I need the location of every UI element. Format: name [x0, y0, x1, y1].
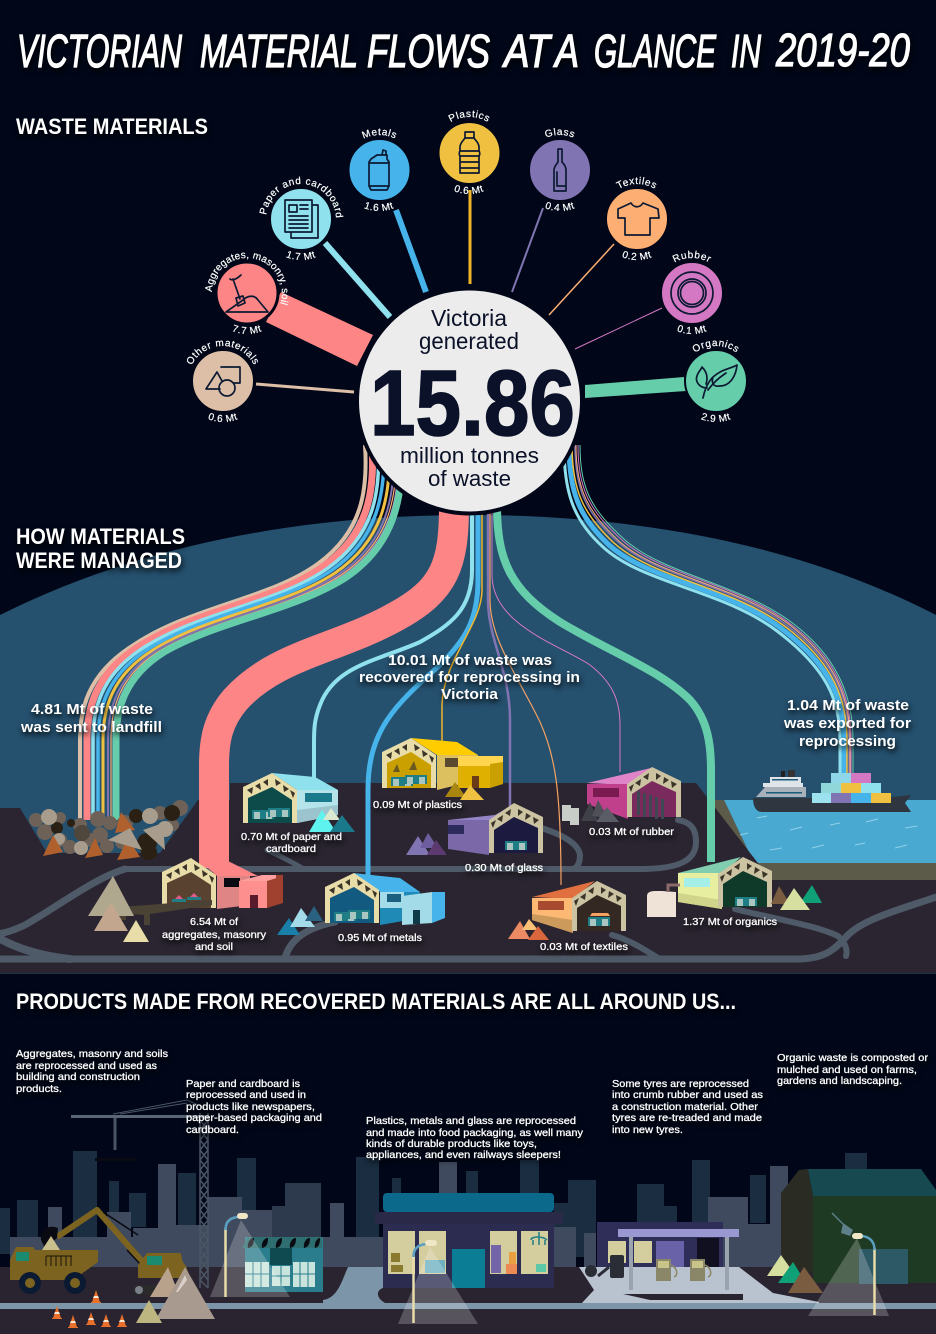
title: MATERIAL [200, 25, 358, 77]
material: rubber: Rubber [672, 250, 712, 262]
material: organics: Organics [692, 340, 738, 352]
material: metals [350, 128, 410, 212]
body text: aggregates [16, 1048, 168, 1095]
material: plastics: Plastics [448, 110, 490, 122]
crane [71, 1100, 208, 1288]
body text: plastics, metals and glass: appliances, and even railways sleepers! [366, 1149, 561, 1161]
body text: organics [777, 1052, 929, 1087]
title: VICTORIAN [17, 25, 183, 77]
material: glass [530, 128, 590, 212]
traffic cones [52, 1290, 127, 1328]
reprocessing tonnage labels: 6.54 Mt of [190, 916, 238, 928]
green barn [781, 1169, 936, 1284]
flow exported [564, 445, 853, 775]
organics piles [767, 1255, 823, 1293]
truck and excavator [10, 1210, 190, 1295]
flow label: exported: reprocessing [799, 734, 896, 750]
city skyline [0, 1151, 936, 1334]
material: textiles: Textiles [616, 176, 656, 188]
street lamp three [808, 1233, 889, 1316]
heading: waste materials: WASTE MATERIALS [16, 114, 208, 139]
building: rubber [562, 767, 681, 825]
reprocessing tonnage labels: 0.95 Mt of metals [338, 932, 422, 944]
central total circle: Victoria [431, 305, 507, 331]
material: other materials [186, 340, 258, 422]
material: rubber: 0.1 Mt [678, 325, 707, 334]
spokes from materials into the waste total [256, 190, 686, 398]
building: metals [277, 873, 445, 935]
central total circle: generated [419, 328, 519, 354]
material: aggregates, masonry, soil [205, 252, 288, 334]
material: rubber [662, 250, 722, 334]
title: GLANCE [594, 25, 717, 77]
body text: aggregates: products. [16, 1083, 62, 1095]
central total circle: 15.86 [370, 351, 575, 455]
body text: tyres: a construction material. Other [612, 1101, 759, 1113]
flow label: exported [783, 698, 911, 750]
material: metals: Metals [362, 128, 396, 138]
building: paper and cardboard [243, 773, 355, 832]
heading: how materials were managed [16, 524, 185, 573]
flow label: reprocessed in Victoria [359, 653, 580, 703]
reprocessing tonnage labels [162, 799, 777, 953]
material: glass: 0.4 Mt [546, 202, 575, 212]
title: IN [731, 25, 762, 77]
title: AT [502, 25, 552, 77]
material: plastics: 0.6 Mt [454, 185, 484, 194]
hemisphere backdrop [0, 515, 936, 880]
central total circle [357, 288, 582, 514]
title [17, 24, 910, 77]
body text: tyres: tyres are re-treaded and made [612, 1112, 762, 1124]
body text: tyres [612, 1078, 763, 1136]
body text: paper: cardboard. [186, 1124, 239, 1136]
material: aggregates, masonry, soil: 7.7 Mt [233, 324, 262, 334]
building: aggregates, masonry and soil [88, 858, 283, 942]
forecourts and road [0, 1267, 936, 1309]
heading: products: PRODUCTS MADE FROM RECOVERED MATERIALS ARE ALL AROUND US... [16, 989, 736, 1014]
shop for plastics, metals and glass products [375, 1193, 563, 1288]
reprocessing tonnage labels: 0.70 Mt of paper and [241, 831, 342, 843]
building: textiles [508, 881, 626, 940]
body text: tyres: into new tyres. [612, 1124, 683, 1136]
flow label: reprocessed in Victoria: 10.01 Mt of waste was [388, 653, 552, 669]
material: textiles [607, 176, 667, 260]
flow label: exported: was exported for [783, 716, 911, 732]
body text: plastics, metals and glass: and made into food packaging, as well many [366, 1127, 584, 1139]
body text: tyres: Some tyres are reprocessed [612, 1078, 749, 1090]
building: glass [406, 803, 543, 855]
material: organics [684, 340, 746, 422]
central total circle: of waste [428, 466, 511, 491]
body text: paper [186, 1078, 322, 1136]
reprocessing tonnage labels: 1.37 Mt of organics [683, 916, 777, 928]
material: paper and cardboard: Paper and cardboard [259, 176, 344, 218]
reprocessing tonnage labels: 0.30 Mt of glass [465, 862, 543, 874]
material: plastics [440, 110, 500, 194]
landfill rock pile [29, 800, 188, 860]
reprocessing tonnage labels: aggregates, masonry [162, 929, 267, 941]
body text: aggregates: are reprocessed and used as [16, 1060, 157, 1072]
reprocessing tonnage labels: 0.03 Mt of textiles [540, 941, 628, 953]
material: other materials: 0.6 Mt [208, 413, 238, 422]
construction material piles [136, 1267, 215, 1323]
title: FLOWS [367, 25, 490, 77]
material: organics: 2.9 Mt [701, 413, 731, 422]
material: glass: Glass [545, 128, 574, 138]
body text: paper: Paper and cardboard is [186, 1078, 300, 1090]
heading: how materials were managed: WERE MANAGED [16, 548, 182, 573]
material: metals: 1.6 Mt [364, 202, 394, 212]
flow to landfill [80, 445, 402, 830]
body text: paper: products like newspapers, [186, 1101, 315, 1113]
paper products shop [242, 1237, 323, 1292]
material: other materials: Other materials [186, 340, 258, 364]
reprocessing tonnage labels: 0.09 Mt of plastics [373, 799, 462, 811]
body text: paper: paper-based packaging and [186, 1112, 322, 1124]
body text: aggregates: building and construction [16, 1071, 140, 1083]
reprocessing tonnage labels: cardboard [266, 843, 316, 855]
material: textiles: 0.2 Mt [622, 251, 652, 260]
body text: plastics, metals and glass: kinds of durable products like toys, [366, 1138, 537, 1150]
material: aggregates, masonry, soil: Aggregates, masonry, soil [205, 252, 288, 306]
body text: organics: gardens and landscaping. [777, 1075, 902, 1087]
body text: paper: reprocessed and used in [186, 1089, 306, 1101]
petrol station [585, 1222, 739, 1290]
material: paper and cardboard: 1.7 Mt [286, 251, 316, 260]
body text: organics: Organic waste is composted or [777, 1052, 929, 1064]
flow label: landfill: 4.81 Mt of waste [31, 702, 153, 718]
title: A [553, 25, 579, 77]
building: plastics [382, 738, 503, 800]
flow label: landfill: was sent to landfill [20, 720, 162, 736]
building: organics [647, 857, 822, 917]
street lamp one [210, 1213, 290, 1297]
ground and port [0, 783, 936, 974]
heading: how materials were managed: HOW MATERIALS [16, 524, 185, 549]
flow label: reprocessed in Victoria: recovered for reprocessing in [359, 670, 580, 686]
street lamp two [398, 1240, 478, 1324]
export ship and containers [753, 770, 911, 812]
material: paper and cardboard [259, 176, 344, 260]
flows to local reprocessing [214, 505, 711, 885]
body text: plastics, metals and glass [366, 1115, 584, 1161]
reprocessing tonnage labels: 0.03 Mt of rubber [589, 826, 675, 838]
body text: organics: mulched and used on farms, [777, 1064, 917, 1076]
flow label: exported: 1.04 Mt of waste [787, 698, 909, 714]
body text: plastics, metals and glass: Plastics, metals and glass are reprocessed [366, 1115, 576, 1127]
flow label: landfill [20, 702, 162, 736]
roads [0, 820, 936, 959]
flow label: reprocessed in Victoria: Victoria [441, 687, 499, 703]
body text: tyres: into crumb rubber and used as [612, 1089, 763, 1101]
body text: aggregates: Aggregates, masonry and soils [16, 1048, 168, 1060]
reprocessing tonnage labels: and soil [195, 941, 233, 953]
central total circle: million tonnes [400, 443, 539, 468]
